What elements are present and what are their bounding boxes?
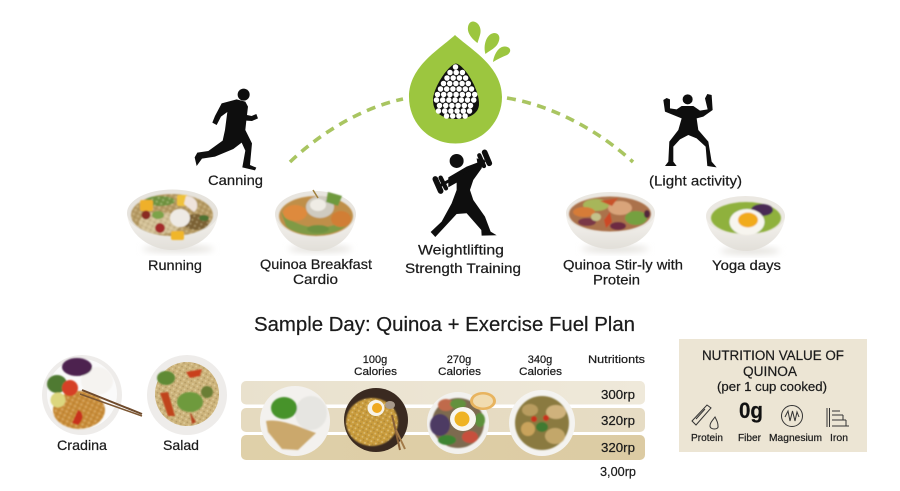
label: Canning: Canning — [208, 172, 263, 188]
meal plan table — [241, 354, 646, 479]
label: Quinoa Breakfast Cardio: Cardio — [293, 271, 338, 287]
column heading: 100g Calories: 100g — [363, 354, 387, 366]
plate: chicken vegetable bowl — [509, 390, 575, 456]
column heading: 100g Calories: Calories — [354, 366, 398, 378]
icon: weightlifter silhouette — [431, 152, 497, 237]
label: Weightlifting Strength Training: Strength Training — [405, 260, 521, 276]
icon: flexing figure silhouette — [663, 94, 717, 167]
icon: iron stacked bars — [827, 408, 849, 427]
bowl: running bowl — [127, 190, 218, 252]
row band 1 — [241, 381, 645, 404]
icon: quinoa grain cluster — [433, 64, 479, 119]
column heading: 340g Calories: Calories — [519, 366, 563, 378]
label: Cradina: Cradina — [57, 437, 107, 453]
label: Light activity: (Light activity) — [649, 172, 742, 188]
icon: splash droplets — [468, 22, 510, 62]
column heading: 340g Calories: 340g — [528, 354, 552, 366]
hero: quinoa drop logo — [409, 22, 510, 144]
plate: noodle bowl with egg — [344, 388, 408, 452]
column heading: 270g Calories: 270g — [447, 354, 471, 366]
plate: Salad — [147, 355, 227, 435]
panel heading: NUTRITION VALUE OF — [702, 348, 844, 363]
label: Iron: Iron — [830, 432, 848, 444]
label: Protein: Protein — [691, 432, 723, 444]
dashed arc: left — [290, 99, 403, 162]
icon: protein bar and drop — [692, 405, 718, 429]
value: 320rp row 3: 320rp — [601, 440, 635, 455]
icon: magnesium circle — [782, 406, 802, 426]
bowl: stir-fry bowl — [566, 192, 655, 252]
stat: 0g: 0g — [739, 398, 763, 423]
panel subheading: (per 1 cup cooked) — [717, 379, 827, 394]
row band 2 — [241, 408, 645, 432]
icon: green drop — [409, 35, 502, 144]
label: Weightlifting Strength Training: Weightlifting — [418, 242, 504, 258]
plate: chicken and rice — [260, 386, 330, 456]
value: 320rp row 2: 320rp — [601, 413, 635, 428]
dashed arc: right — [507, 98, 633, 162]
row band 3 — [241, 435, 645, 460]
panel: nutrition value — [679, 339, 867, 452]
panel heading: QUINOA — [743, 364, 797, 379]
label: Running: Running — [148, 257, 202, 273]
label: Fiber: Fiber — [738, 432, 761, 444]
label: Quinoa Stir-ly with Protein: Protein — [593, 272, 640, 288]
label: Salad: Salad — [163, 437, 199, 453]
label: Quinoa Breakfast Cardio: Quinoa Breakfast — [260, 256, 372, 272]
column heading: Nutritionts: Nutritionts — [588, 354, 646, 366]
bowl: quinoa breakfast bowl — [275, 190, 356, 252]
column heading: 270g Calories: Calories — [438, 366, 482, 378]
value: 300rp: 300rp — [601, 387, 635, 402]
bowl: yoga egg bowl — [706, 196, 785, 254]
plate: Cradina — [42, 355, 142, 435]
icon: runner silhouette — [195, 89, 258, 170]
label: Yoga days: Yoga days — [712, 257, 781, 273]
plate: egg salad bowl — [427, 392, 496, 454]
value: 3,00rp total: 3,00rp — [600, 464, 636, 479]
label: Quinoa Stir-ly with Protein: Quinoa Stir-ly with — [563, 256, 683, 272]
label: Magnesium: Magnesium — [769, 432, 822, 444]
title: Sample Day: Quinoa + Exercise Fuel Plan — [254, 314, 635, 336]
